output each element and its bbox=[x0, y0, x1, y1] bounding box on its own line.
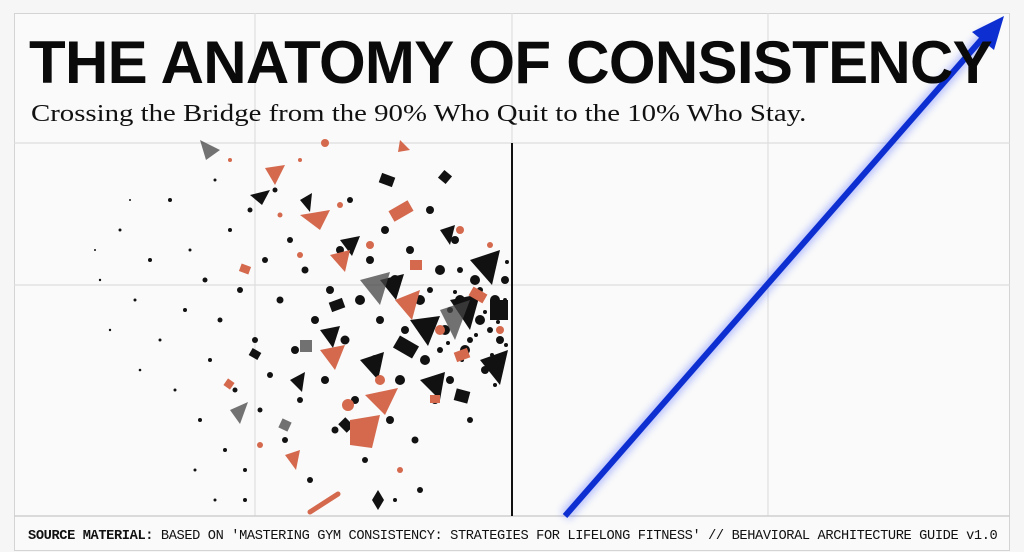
footer: source note: SOURCE MATERIAL: BASED ON 'MASTERING GYM CONSISTENCY: STRATEGIES FOR LIFELONG FITNESS' // BEHAVIORAL ARCHITECTURE GUIDE v1.0 bbox=[28, 528, 997, 544]
divider: black vertical line bbox=[511, 143, 513, 516]
subtitle: Crossing the Bridge from the 90% Who Quit to the 10% Who Stay. bbox=[31, 101, 806, 127]
title: THE ANATOMY OF CONSISTENCY bbox=[29, 29, 992, 96]
